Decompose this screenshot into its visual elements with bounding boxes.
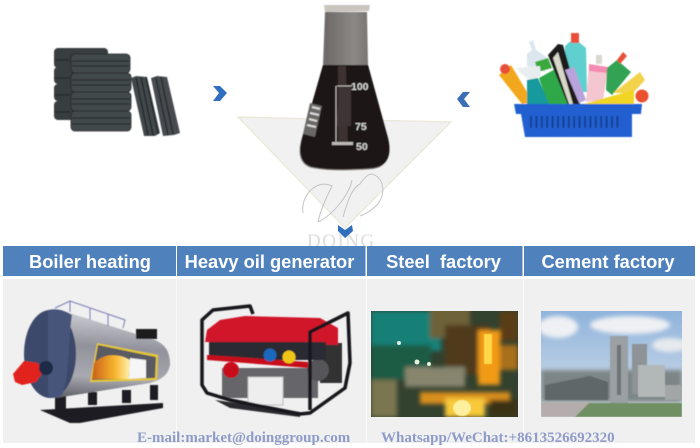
photo: steel factory — [371, 308, 518, 417]
contact: email: E-mail:market@doinggroup.com — [137, 430, 351, 446]
header: Cement factory: Cement factory — [541, 251, 675, 272]
icon: basket of bottles — [499, 33, 648, 137]
header: Steel factory: Steel factory — [386, 251, 502, 272]
panel: application backgrounds — [3, 279, 695, 443]
header: Boiler heating: Boiler heating — [29, 251, 151, 272]
funnel triangle — [238, 117, 451, 228]
contact: whatsapp: Whatsapp/WeChat:+8613526692320 — [381, 430, 615, 446]
icon: generator — [202, 306, 350, 417]
icon: oil flask — [299, 5, 389, 170]
flask scale numbers: 50 — [356, 141, 368, 153]
icon: boiler — [13, 301, 170, 423]
arrow: down — [338, 225, 353, 238]
watermark: DOING logo — [303, 174, 383, 252]
flask scale numbers: 100 — [351, 81, 369, 93]
header: Steel factory — [367, 246, 522, 276]
watermark: DOING logo: DOING — [307, 231, 376, 252]
photo: cement factory — [538, 311, 688, 417]
flask scale numbers — [351, 81, 369, 153]
header: Cement factory — [524, 246, 695, 276]
header: Heavy oil generator — [177, 246, 366, 276]
icon: stacked tires — [54, 48, 180, 136]
arrow: right — [213, 86, 227, 101]
header: Heavy oil generator: Heavy oil generator — [185, 251, 354, 272]
flask scale numbers: 75 — [355, 121, 367, 133]
arrow: left — [457, 92, 470, 107]
header: Boiler heating — [3, 246, 176, 276]
